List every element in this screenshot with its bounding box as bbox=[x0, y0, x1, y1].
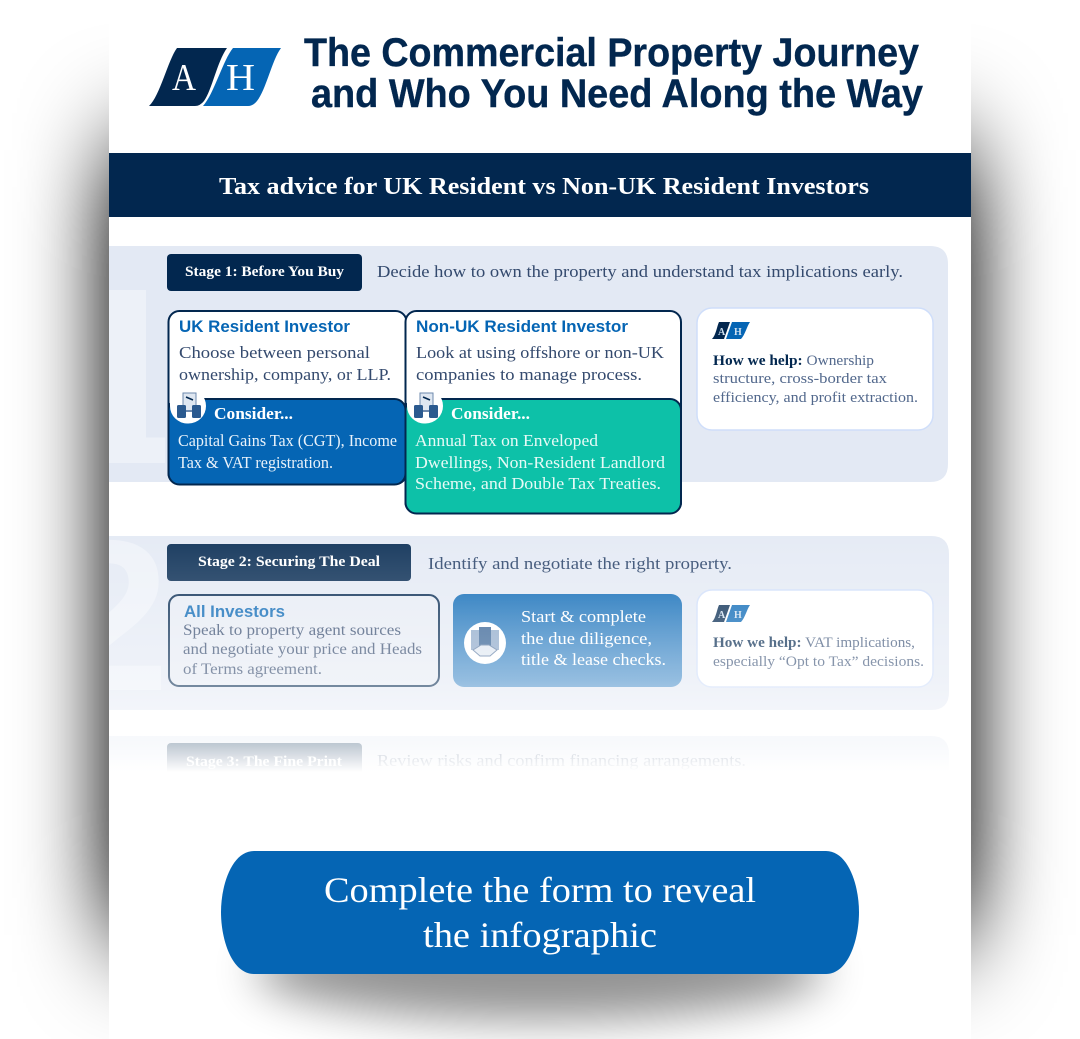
fade overlay bbox=[109, 520, 971, 1039]
logo: AH: H bbox=[226, 57, 255, 99]
icon: building and handshake bbox=[464, 622, 506, 664]
card: UK consider: Capital Gains Tax (CGT), Income bbox=[178, 431, 397, 450]
card: all investors: and negotiate your price and Heads bbox=[183, 641, 422, 658]
call to action button bbox=[221, 851, 859, 974]
card: UK resident investor: UK Resident Investor bbox=[179, 317, 350, 336]
panel: stage 3 bbox=[109, 736, 949, 800]
card: due diligence bbox=[453, 594, 682, 687]
icon: small AH logo bbox=[712, 322, 750, 339]
card: non-UK consider: Scheme, and Double Tax Treaties. bbox=[415, 474, 661, 493]
title: The Commercial Property Journey bbox=[304, 31, 920, 75]
stage 2 pill bbox=[167, 544, 411, 581]
stage 1 pill: Stage 1: Before You Buy bbox=[185, 264, 345, 280]
card: non-UK resident investor: companies to manage process. bbox=[416, 365, 642, 384]
panel: stage 1 bbox=[109, 246, 948, 514]
card: due diligence: Start & complete bbox=[521, 607, 646, 626]
card: all investors bbox=[169, 595, 439, 686]
icon: small AH logo: A bbox=[718, 327, 726, 338]
card: non-UK resident investor: Look at using offshore or non-UK bbox=[416, 343, 665, 362]
card: UK resident investor: Choose between personal bbox=[179, 343, 370, 362]
card: non-UK resident investor: Non-UK Resident Investor bbox=[416, 317, 628, 336]
logo: AH: A bbox=[172, 57, 196, 99]
watermark numeral 2: 2 bbox=[50, 495, 170, 736]
card: due diligence: title & lease checks. bbox=[521, 650, 666, 669]
stage 2 description: Identify and negotiate the right property. bbox=[428, 554, 732, 573]
header band: Tax advice for UK Resident vs Non-UK Resident Investors bbox=[219, 174, 869, 200]
panel: stage 2 bbox=[109, 536, 949, 710]
card: how we help, stage 2: How we help: VAT implications, bbox=[713, 635, 915, 651]
card: how we help, stage 1 bbox=[697, 308, 933, 430]
icon: small AH logo: H bbox=[734, 610, 742, 621]
logo: AH bbox=[149, 48, 281, 106]
card: non-UK consider: Annual Tax on Enveloped bbox=[415, 431, 599, 450]
card: all investors: Speak to property agent sources bbox=[183, 622, 401, 639]
card: all investors: All Investors bbox=[184, 602, 285, 621]
call to action button: the infographic bbox=[423, 915, 657, 955]
page background bbox=[109, 0, 971, 1039]
title: and Who You Need Along the Way bbox=[311, 72, 924, 116]
stage 2 pill: Stage 2: Securing The Deal bbox=[198, 554, 380, 570]
card: UK consider: Consider... bbox=[214, 404, 293, 423]
stage 1 pill bbox=[167, 254, 362, 291]
card: due diligence: the due diligence, bbox=[521, 629, 652, 648]
stage 1 background bbox=[109, 246, 948, 482]
card: UK resident investor: ownership, company, or LLP. bbox=[179, 365, 391, 384]
stage 3 background bbox=[109, 736, 949, 800]
button shadow bbox=[237, 966, 843, 1039]
icon: documents and calculators bbox=[407, 388, 443, 424]
stage 1 description: Decide how to own the property and understand tax implications early. bbox=[377, 262, 903, 281]
watermark numeral 1: 1 bbox=[33, 237, 172, 516]
page drop shadow bbox=[105, 150, 975, 935]
stage 3 description: Review risks and confirm financing arrangements. bbox=[377, 751, 746, 770]
card: UK resident investor bbox=[168, 311, 406, 484]
icon: small AH logo bbox=[712, 605, 750, 622]
card: how we help, stage 1: efficiency, and profit extraction. bbox=[713, 390, 918, 406]
header band bbox=[109, 153, 971, 217]
icon: small AH logo: A bbox=[718, 610, 726, 621]
card: how we help, stage 2 bbox=[697, 590, 933, 687]
icon: documents and calculators bbox=[170, 388, 206, 424]
card: non-UK consider: Consider... bbox=[451, 404, 530, 423]
title bbox=[304, 31, 924, 116]
stage 3 pill bbox=[167, 743, 362, 780]
card: how we help, stage 1: How we help: Ownership bbox=[713, 353, 874, 369]
card: how we help, stage 2: especially “Opt to Tax” decisions. bbox=[713, 654, 924, 670]
card: non-UK consider bbox=[406, 388, 681, 514]
card: non-UK consider: Dwellings, Non-Resident Landlord bbox=[415, 453, 666, 472]
card: UK consider: Tax & VAT registration. bbox=[178, 453, 333, 472]
stage 3 pill: Stage 3: The Fine Print bbox=[186, 754, 342, 770]
card: non-UK resident investor bbox=[406, 311, 681, 513]
card: all investors: of Terms agreement. bbox=[183, 661, 322, 678]
card: how we help, stage 1: structure, cross-border tax bbox=[713, 371, 888, 387]
stage 2 background bbox=[109, 536, 949, 710]
call to action button: Complete the form to reveal bbox=[324, 870, 756, 910]
icon: small AH logo: H bbox=[734, 327, 742, 338]
card: UK consider bbox=[168, 388, 406, 484]
watermark numeral 1 bbox=[109, 290, 165, 463]
